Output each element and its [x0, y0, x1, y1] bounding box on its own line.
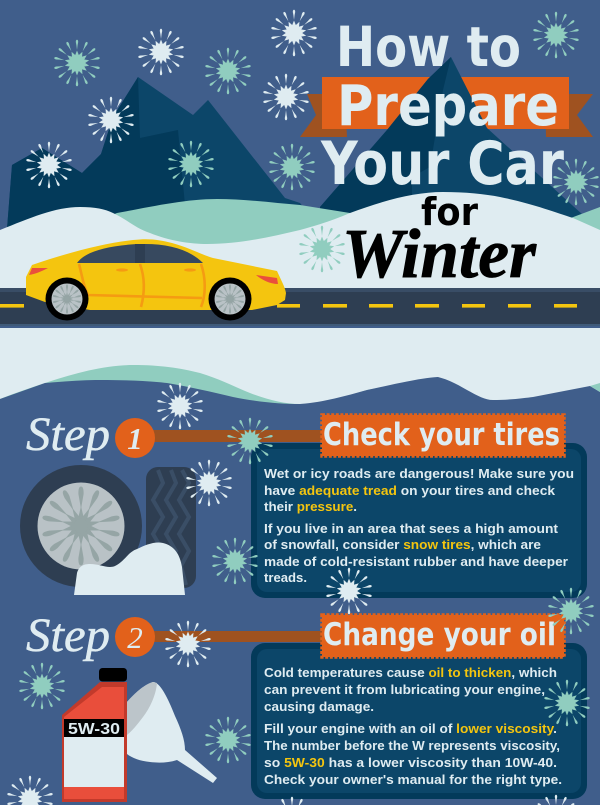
- panel: step 1 text: their pressure .: [264, 500, 357, 514]
- icon: oil bottle: 5W-30: [68, 721, 120, 738]
- mountains left: [7, 77, 330, 240]
- icon: funnel: [127, 682, 217, 783]
- panel: step 1 text: have adequate tread on your tires and check: [264, 484, 556, 498]
- step 2 heading: 2: [127, 620, 143, 655]
- snowflakes lower: [7, 383, 594, 805]
- heading: change your oil: Change your oil: [323, 617, 556, 653]
- panel: step 2 text: causing damage.: [264, 700, 374, 714]
- icon: tire: [20, 465, 196, 595]
- step 1 heading: Step: [26, 408, 110, 461]
- panel: step 1 text: If you live in an area that sees a high amount: [264, 522, 559, 536]
- panel: step 2 text: Check your owner's manual for the right type.: [264, 773, 562, 787]
- teal hills: [100, 199, 600, 260]
- heading: check your tires: Check your tires: [323, 417, 560, 453]
- panel: step 1 text: made of cold-resistant rubber and have deeper: [264, 555, 568, 569]
- panel: step 2 text: can prevent it from lubricating your engine,: [264, 683, 545, 697]
- panel: step 2 text: Fill your engine with an oil of lower viscosity .: [264, 722, 557, 736]
- title: Your Car: [320, 129, 564, 199]
- panel: step 2 text: so 5W-30 has a lower viscosity than 10W-40.: [264, 756, 557, 770]
- title: Prepare: [337, 74, 559, 139]
- title: for: [421, 190, 478, 234]
- title: How to: [336, 15, 521, 79]
- panel: step 1 text: treads.: [264, 571, 307, 585]
- title ribbon: [300, 77, 593, 137]
- step 2 heading: [26, 609, 325, 662]
- step 1 heading: [26, 408, 325, 461]
- panel: step 1 text: Wet or icy roads are dangerous! Make sure you: [264, 467, 574, 481]
- title: Winter: [342, 216, 537, 293]
- car: [26, 239, 286, 320]
- title: [320, 15, 564, 293]
- step 2 heading: Step: [26, 609, 110, 662]
- panel: step 2 text: [251, 643, 587, 799]
- snow hills: [0, 192, 600, 295]
- panel: step 2 text: The number before the W represents viscosity,: [264, 739, 560, 753]
- panel: step 1 text: of snowfall, consider snow tires , which are: [264, 538, 541, 552]
- panel: step 2 text: Cold temperatures cause oil to thicken , which: [264, 666, 557, 680]
- icon: oil bottle: [62, 668, 127, 802]
- road: [0, 288, 600, 326]
- step 1 heading: 1: [127, 421, 143, 456]
- snowflakes upper: [26, 10, 599, 272]
- snow band with hills: [0, 328, 600, 420]
- panel: step 1 text: [251, 443, 587, 598]
- mountain right: [320, 57, 590, 240]
